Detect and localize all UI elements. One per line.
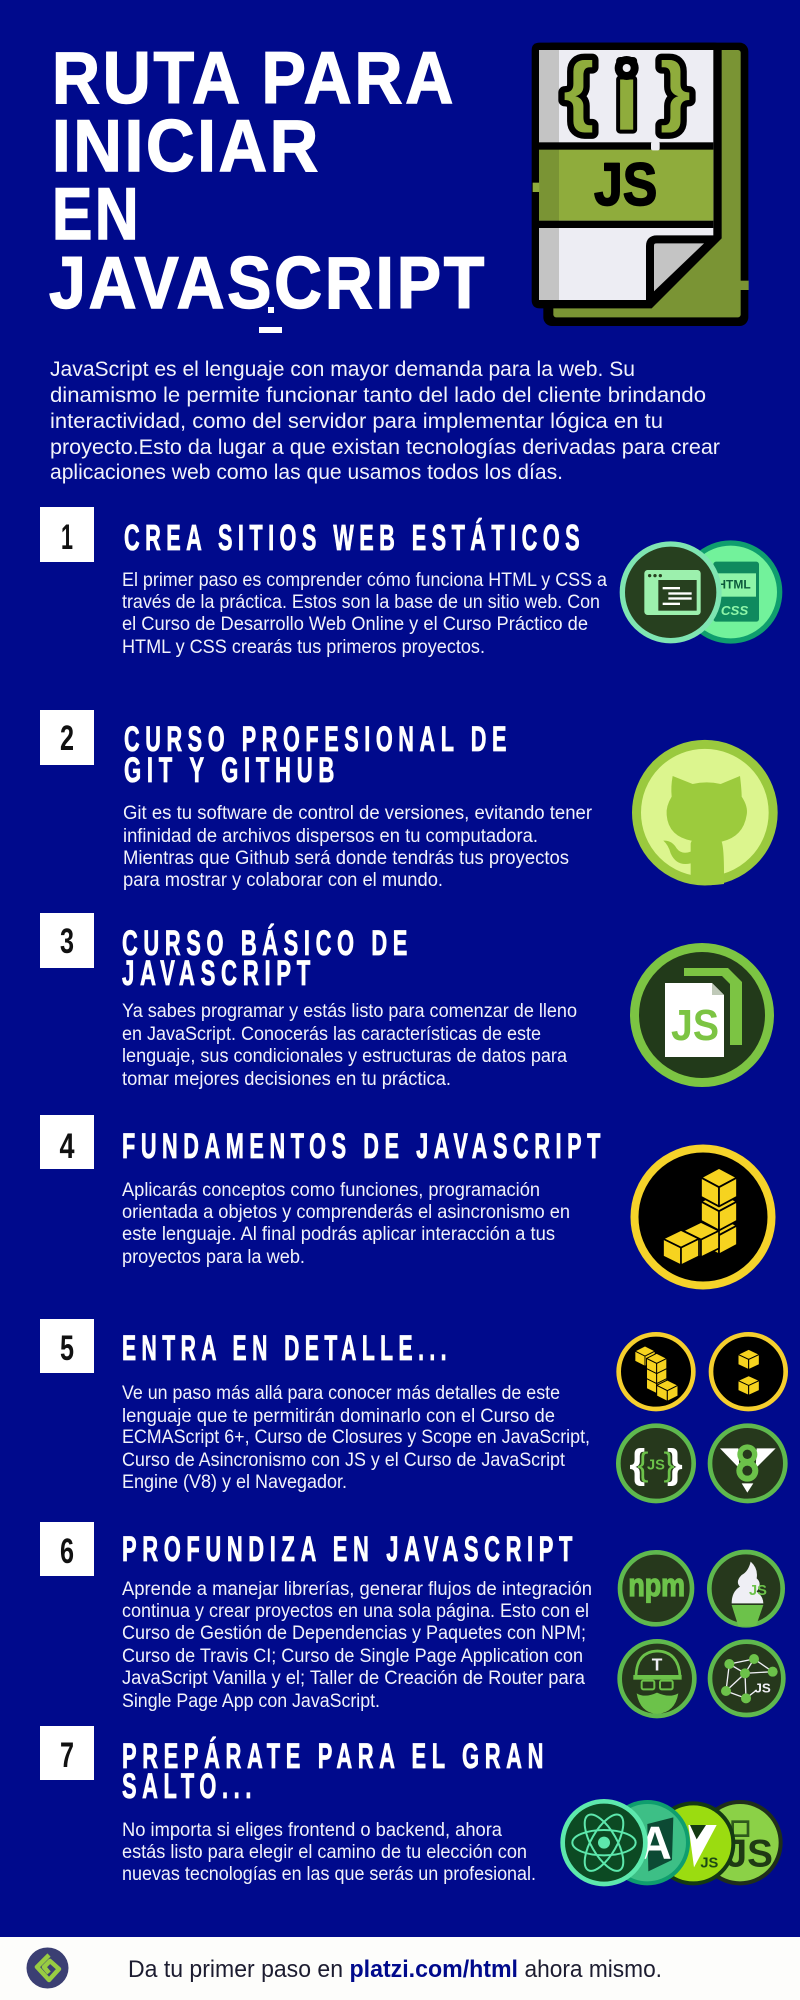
number badge 6: 6 bbox=[60, 1532, 74, 1571]
text: step 5: ECMAScript 6+, Curso de Closures y Scope en JavaScript, bbox=[122, 1427, 590, 1448]
text: step 2: infinidad de archivos dispersos en tu computadora. bbox=[123, 826, 538, 847]
intro text: dinamismo le permite funcionar tanto del lado del cliente brindando bbox=[50, 383, 706, 407]
intro text: aplicaciones web como las que usamos todos los días. bbox=[50, 460, 563, 484]
text: step 4: proyectos para la web. bbox=[122, 1247, 305, 1268]
number badge 4: 4 bbox=[60, 1127, 75, 1166]
icon: vanilla ice cream: JS bbox=[749, 1583, 767, 1599]
number badge 7 bbox=[40, 1726, 94, 1780]
icon: npm bbox=[620, 1552, 692, 1624]
text: step 6: Single Page App con JavaScript. bbox=[122, 1691, 380, 1712]
text: step 7: No importa si eliges frontend o backend, ahora bbox=[122, 1820, 502, 1841]
text: step 6: continua y crear proyectos en una sola página. Esto con el bbox=[122, 1601, 589, 1622]
text: step 1 bbox=[122, 570, 607, 658]
call to action: Da tu primer paso en bbox=[128, 1956, 343, 1983]
icon: node js bbox=[699, 1802, 781, 1883]
icon: router network: JS bbox=[755, 1681, 771, 1696]
intro text bbox=[50, 357, 720, 484]
icons: frameworks bbox=[563, 1801, 781, 1884]
icon: javascript file: i bbox=[613, 44, 640, 150]
text: step 7: estás listo para elegir el camino de tu elección con bbox=[122, 1842, 527, 1863]
panel: step 3 bbox=[40, 913, 770, 1090]
icon: javascript file: } bbox=[660, 46, 690, 134]
text: step 6: JavaScript Vanilla y el; Taller de Creación de Router para bbox=[122, 1668, 585, 1689]
number badge 5: 5 bbox=[60, 1329, 74, 1368]
title: RUTA PARA bbox=[52, 38, 456, 119]
text: step 2: para mostrar y colaborar con el mundo. bbox=[123, 870, 443, 891]
icon: platzi logo bbox=[26, 1948, 68, 1988]
number badge 1: 1 bbox=[61, 518, 73, 557]
footer band bbox=[0, 1937, 800, 2000]
call to action: ahora mismo. bbox=[524, 1956, 662, 1983]
icons: step 5 course badges bbox=[618, 1334, 786, 1501]
icon: javascript file: { bbox=[563, 46, 594, 134]
text: step 3 bbox=[122, 1001, 577, 1090]
text: step 6: Aprende a manejar librerías, generar flujos de integración bbox=[122, 1579, 592, 1600]
icon: ecmascript braces: } bbox=[667, 1440, 683, 1486]
intro text: interactividad, como del servidor para implementar lógica en tu bbox=[50, 409, 663, 433]
icon: two blocks bbox=[711, 1334, 786, 1409]
heading: step 2: CURSO PROFESIONAL DE bbox=[124, 720, 512, 759]
title: INICIAR bbox=[52, 106, 321, 187]
panel: step 4 bbox=[40, 1115, 772, 1286]
icon: vue js: JS bbox=[700, 1855, 719, 1871]
title: EN bbox=[52, 174, 141, 255]
icon: js file bbox=[634, 948, 770, 1082]
number badge 4 bbox=[40, 1115, 94, 1169]
text: step 4: orientada a objetos y comprenderás el asincronismo en bbox=[122, 1202, 570, 1223]
icon: travis ci: T bbox=[652, 1655, 663, 1675]
title: JAVASCRIPT bbox=[49, 243, 487, 324]
icon: v8 engine bbox=[710, 1426, 785, 1501]
icon: javascript file: JS bbox=[594, 151, 657, 218]
heading: step 7 bbox=[122, 1736, 549, 1806]
icons: step 6 course badges bbox=[620, 1552, 783, 1716]
icon: travis ci bbox=[620, 1641, 694, 1716]
icon: react bbox=[563, 1801, 645, 1884]
icon: angular: A bbox=[638, 1817, 672, 1869]
text: step 2 bbox=[123, 803, 593, 891]
panel: step 7 bbox=[40, 1726, 781, 1885]
text: step 4: este lenguaje. Al final podrás aplicar interacción a tus bbox=[122, 1224, 555, 1245]
text: step 6: Curso de Travis CI; Curso de Single Page Application con bbox=[122, 1646, 583, 1667]
icon: github bbox=[636, 744, 773, 885]
number badge 6 bbox=[40, 1522, 94, 1576]
heading: step 7: PREPÁRATE PARA EL GRAN bbox=[122, 1736, 549, 1776]
text: step 5: Curso de Asincronismo con JS y el Curso de JavaScript bbox=[122, 1450, 566, 1471]
icon: node js: JS bbox=[726, 1833, 773, 1876]
text: step 5: Engine (V8) y el Navegador. bbox=[122, 1472, 347, 1493]
number badge 2 bbox=[40, 710, 94, 765]
heading: step 3 bbox=[122, 923, 413, 993]
icon: html and css bbox=[622, 543, 780, 641]
number badge 2: 2 bbox=[60, 719, 74, 758]
call to action: platzi.com/html bbox=[350, 1956, 518, 1983]
icon: js file: JS bbox=[671, 1001, 719, 1050]
number badge 7: 7 bbox=[60, 1736, 74, 1775]
number badge 5 bbox=[40, 1319, 94, 1373]
text: step 4: Aplicarás conceptos como funciones, programación bbox=[122, 1180, 540, 1201]
text: step 3: lenguaje, sus condicionales y estructuras de datos para bbox=[122, 1046, 567, 1067]
text: step 5 bbox=[122, 1383, 590, 1493]
text: step 1: HTML y CSS crearás tus primeros proyectos. bbox=[122, 637, 485, 658]
text: step 1: el Curso de Desarrollo Web Online y el Curso Práctico de bbox=[122, 614, 588, 635]
heading: step 3: CURSO BÁSICO DE bbox=[122, 923, 413, 963]
number badge 1 bbox=[40, 507, 94, 562]
text: step 6: Curso de Gestión de Dependencias y Paquetes con NPM; bbox=[122, 1623, 586, 1644]
text: step 7: nuevas tecnologías en las que serás un profesional. bbox=[122, 1864, 536, 1885]
icon: javascript file bbox=[532, 43, 749, 326]
text: step 3: tomar mejores decisiones en tu práctica. bbox=[122, 1069, 451, 1090]
heading: step 2 bbox=[124, 720, 512, 790]
icon: ecmascript braces bbox=[618, 1426, 694, 1501]
icon: router network bbox=[710, 1642, 783, 1715]
text: step 7 bbox=[122, 1820, 536, 1885]
heading: step 2: GIT Y GITHUB bbox=[124, 751, 340, 790]
panel: step 1 bbox=[40, 507, 780, 658]
text: step 1: El primer paso es comprender cómo funciona HTML y CSS a bbox=[122, 570, 607, 591]
panel: step 2 bbox=[40, 710, 773, 891]
text: step 2: Git es tu software de control de versiones, evitando tener bbox=[123, 803, 593, 824]
text: step 6 bbox=[122, 1579, 592, 1712]
icon: ecmascript braces: { bbox=[629, 1440, 645, 1486]
icon: angular bbox=[607, 1802, 688, 1883]
text: step 5: lenguaje que te permitirán dominarlo con el Curso de bbox=[122, 1406, 555, 1427]
panel: step 5 bbox=[40, 1319, 786, 1501]
icon: html and css: CSS bbox=[721, 603, 748, 618]
number badge 3: 3 bbox=[60, 922, 74, 961]
heading: step 3: JAVASCRIPT bbox=[122, 954, 316, 993]
icon: building blocks bbox=[634, 1148, 772, 1286]
text: step 4 bbox=[122, 1180, 570, 1268]
title bbox=[49, 38, 487, 333]
text: step 2: Mientras que Github será donde tendrás tus proyectos bbox=[123, 848, 569, 869]
icon: vue js bbox=[653, 1803, 733, 1883]
number badge 3 bbox=[40, 913, 94, 968]
icon: ecmascript braces: { bbox=[637, 1446, 648, 1483]
icon: vanilla ice cream bbox=[709, 1552, 783, 1626]
text: step 1: través de la práctica. Estos son la base de un sitio web. Con bbox=[122, 592, 600, 613]
text: step 5: Ve un paso más allá para conocer más detalles de este bbox=[122, 1383, 560, 1404]
icon: npm: npm bbox=[628, 1567, 685, 1603]
text: step 3: Ya sabes programar y estás listo para comenzar de lleno bbox=[122, 1001, 577, 1022]
intro text: proyecto.Esto da lugar a que existan tecnologías derivadas para crear bbox=[50, 435, 720, 459]
panel: step 6 bbox=[40, 1522, 783, 1716]
icon: ecmascript braces: JS bbox=[647, 1457, 665, 1473]
icon: ecmascript braces: } bbox=[664, 1446, 675, 1483]
heading: step 5: ENTRA EN DETALLE... bbox=[122, 1329, 452, 1368]
intro text: JavaScript es el lenguaje con mayor demanda para la web. Su bbox=[50, 357, 635, 381]
text: step 3: en JavaScript. Conocerás las características de este bbox=[122, 1024, 541, 1045]
icon: closures blocks bbox=[619, 1334, 693, 1409]
icon: html and css: HTML bbox=[717, 577, 751, 591]
heading: step 7: SALTO... bbox=[122, 1767, 257, 1806]
call to action bbox=[128, 1956, 662, 1983]
